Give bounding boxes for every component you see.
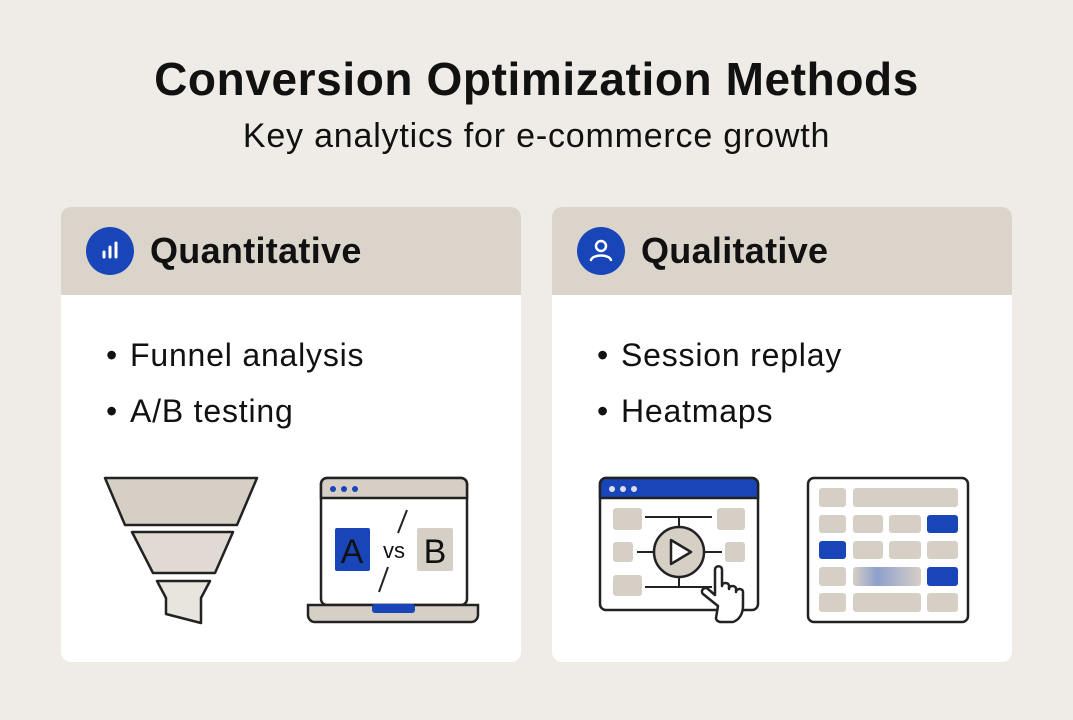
bullet list: • A/B testing <box>106 393 294 429</box>
icon: session replay window <box>600 478 758 622</box>
title: Conversion Optimization Methods <box>154 53 919 105</box>
bullet list <box>106 337 364 429</box>
panel: quantitative <box>61 207 521 662</box>
panel: qualitative <box>552 207 1012 662</box>
icon: laptop A vs B <box>308 478 478 622</box>
bullet list <box>597 337 842 429</box>
bullet list: • Funnel analysis <box>106 337 364 373</box>
icon: laptop A vs B: B <box>424 533 446 571</box>
icon: laptop A vs B: A <box>341 533 364 571</box>
icon: funnel <box>105 478 257 623</box>
header: quantitative <box>61 207 521 295</box>
icon: heatmap grid <box>808 478 968 622</box>
bullet list: • Heatmaps <box>597 393 773 429</box>
header: qualitative: Qualitative <box>641 230 828 271</box>
icon: laptop A vs B: vs <box>383 538 405 563</box>
header: quantitative: Quantitative <box>150 230 362 271</box>
bullet list: • Session replay <box>597 337 842 373</box>
subtitle: Key analytics for e-commerce growth <box>243 117 830 155</box>
header: qualitative <box>552 207 1012 295</box>
